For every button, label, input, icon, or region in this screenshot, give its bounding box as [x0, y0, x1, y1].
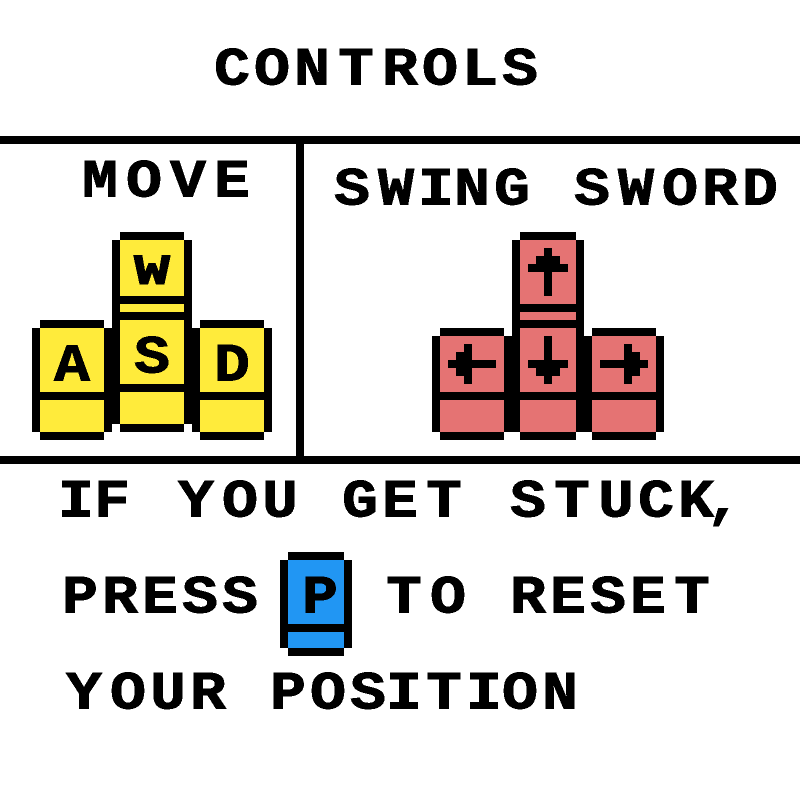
- key: A: [32, 320, 112, 440]
- key: S: [120, 320, 184, 424]
- text: line 2 to reset: TO RESET: [386, 568, 710, 630]
- key: right arrow: [584, 328, 664, 440]
- key: left arrow: [432, 328, 512, 440]
- key: D: [192, 320, 272, 440]
- text block: reset instructions: [58, 472, 742, 726]
- heading: swing sword: SWING SWORD: [334, 160, 778, 222]
- key: A: A: [54, 336, 91, 398]
- key: D: D: [214, 336, 250, 398]
- icon: P key: P: [302, 568, 338, 630]
- icon: arrow keys: [432, 232, 664, 440]
- heading: move: MOVE: [82, 152, 250, 214]
- key: S: S: [134, 328, 170, 390]
- text: line 3: YOUR POSITION: [66, 664, 578, 726]
- panel: move: [32, 152, 272, 440]
- text: line 2 press: PRESS: [62, 568, 258, 630]
- key: W: [112, 232, 192, 432]
- icon: WASD keys: [32, 232, 272, 440]
- title: CONTROLS: [214, 40, 538, 102]
- text: line 1: IF YOU GET STUCK,: [58, 472, 742, 534]
- key: down arrow: [520, 328, 576, 432]
- panel: swing sword: [334, 160, 778, 440]
- icon: P key: [280, 552, 352, 656]
- key: up arrow: [512, 232, 584, 440]
- key: W: W: [134, 248, 171, 297]
